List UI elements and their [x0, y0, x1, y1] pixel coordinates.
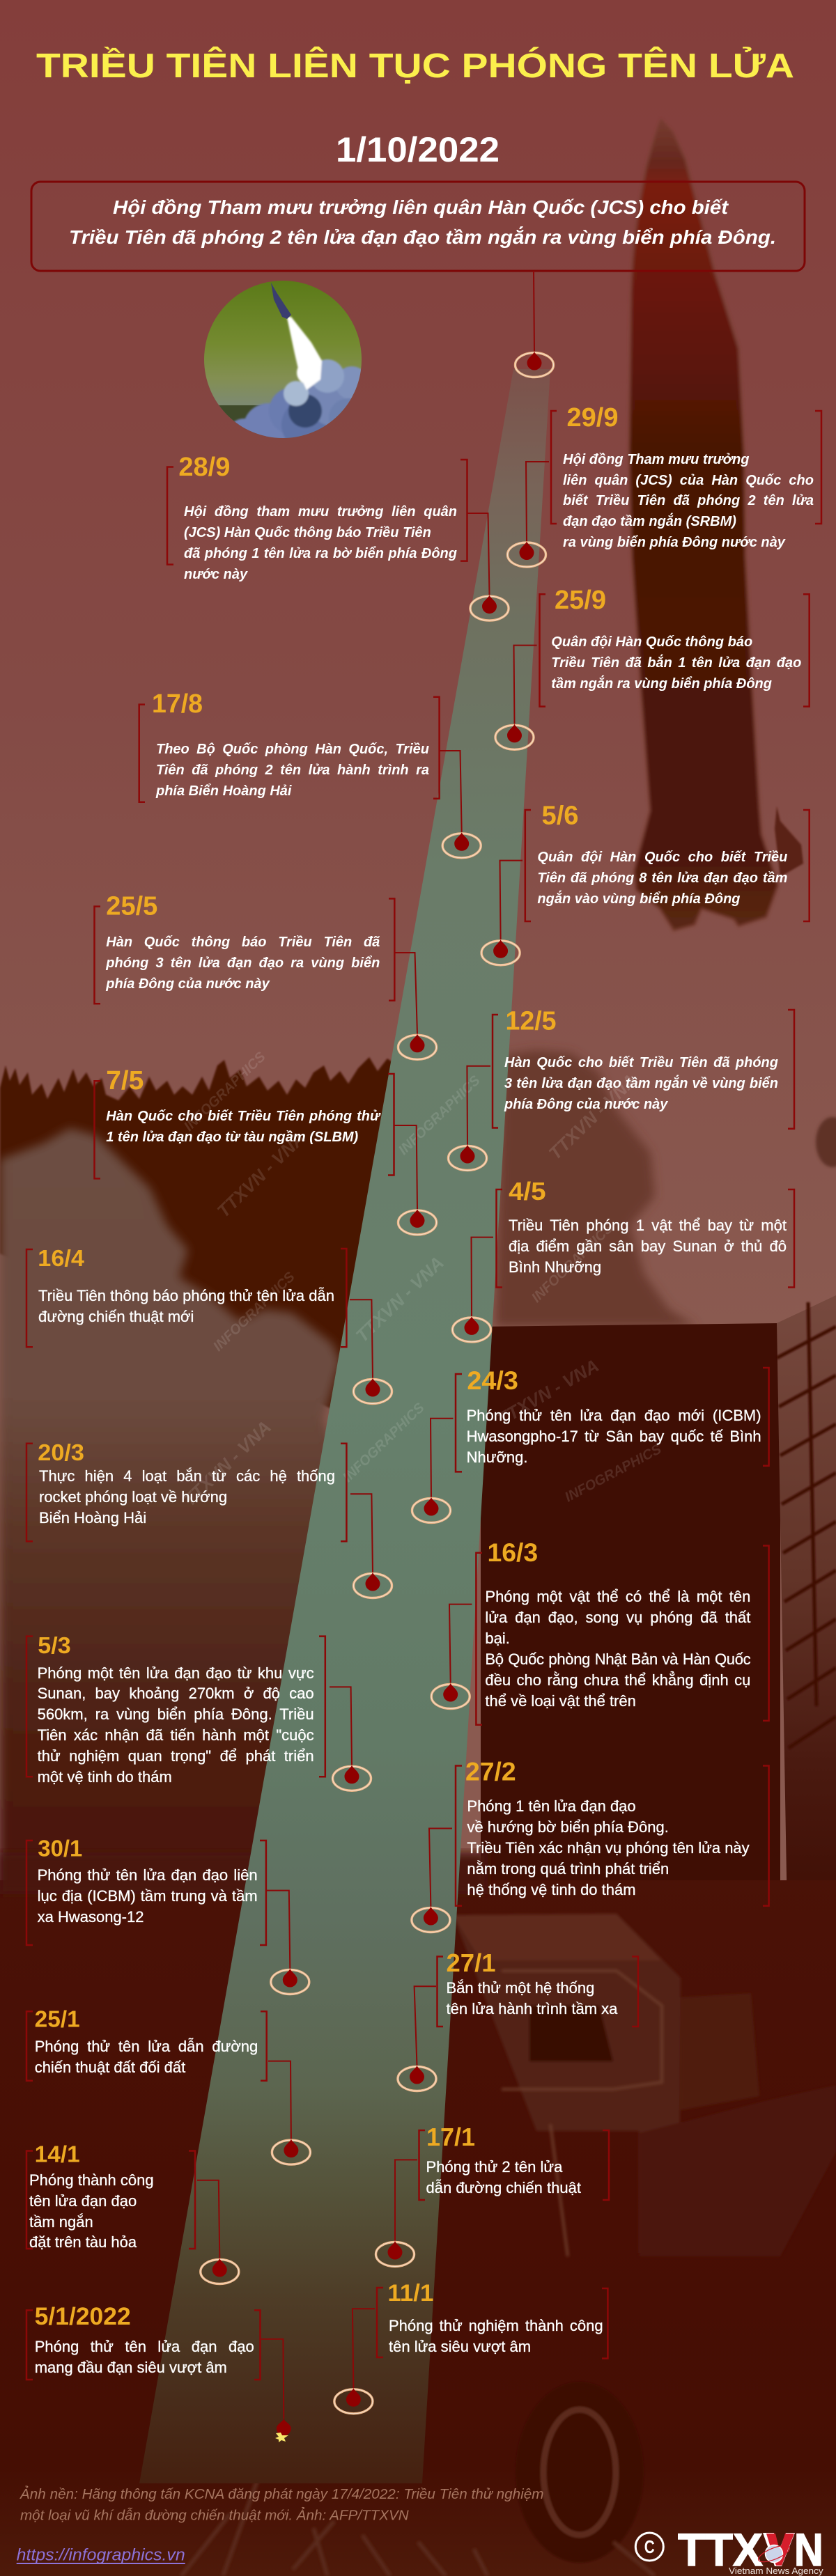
bracket: [493, 1010, 794, 1129]
connector: [395, 2160, 417, 2241]
callout box: [31, 182, 805, 271]
bracket: [496, 1189, 794, 1287]
launcher lattice: [777, 1295, 836, 1915]
text block: Thực hiện 4 loạt bắn từ các hệ thống: [39, 1467, 335, 1485]
watermarks: TTXVN - VNA: [493, 1355, 603, 1430]
text block: [38, 1865, 258, 1928]
copyright symbol: C: [644, 2536, 655, 2557]
marker: [453, 1316, 490, 1342]
text block: đặt trên tàu hỏa: [29, 2233, 137, 2251]
photo credit note: Ảnh nền: Hãng thông tấn KCNA đăng phát ngày 17/4/2022: Triều Tiên thử nghiệm: [19, 2485, 544, 2502]
marker: [507, 542, 546, 567]
grass: [181, 2479, 655, 2576]
text block: [156, 740, 429, 802]
panel: 11/1: [334, 2280, 607, 2414]
connector: [467, 513, 489, 595]
text block: biết Triều Tiên đã phóng 2 tên lửa: [563, 493, 814, 508]
text block: [106, 932, 380, 995]
watermarks: TTXVN - VNA: [545, 1070, 641, 1164]
text block: [426, 2157, 594, 2199]
text block: tầm ngắn ra vùng biển phía Đông: [551, 676, 772, 692]
text block: Phóng thử nghiệm thành công: [389, 2317, 603, 2334]
text block: về hướng bờ biển phía Đông.: [467, 1818, 669, 1836]
final drop: [277, 2419, 291, 2436]
bracket: [26, 1444, 346, 1541]
marker: [412, 1907, 450, 1932]
text block: [504, 1053, 778, 1116]
marker: [449, 1145, 486, 1170]
text block: đã phóng 1 tên lửa ra bờ biển phía Đông: [184, 546, 457, 561]
smoke cloud: [0, 1128, 418, 1894]
bracket: [539, 594, 810, 706]
text block: Quân đội Hàn Quốc cho biết Triều: [537, 850, 787, 865]
text block: Nhưỡng.: [467, 1449, 527, 1466]
text block: tên lửa đạn đạo: [29, 2192, 137, 2210]
watermarks: INFOGRAPHICS: [529, 1220, 617, 1306]
wordmark: N: [794, 2524, 823, 2575]
connector: [415, 1986, 436, 2066]
left tree canopy: [0, 1057, 446, 1462]
panel: 25/9: [495, 586, 810, 749]
text block: [467, 1796, 755, 1900]
marker: [442, 832, 481, 858]
text block: [39, 1466, 335, 1529]
date: 17/8: [152, 689, 203, 719]
text block: 1 tên lửa đạn đạo từ tàu ngầm (SLBM): [106, 1130, 358, 1145]
text block: Hàn Quốc cho biết Triều Tiên đã phóng: [504, 1055, 778, 1070]
date: 5/1/2022: [35, 2303, 131, 2330]
text block: [563, 450, 814, 554]
watermarks: TTXVN - VNA: [213, 1127, 309, 1221]
text block: [38, 1286, 334, 1327]
marker: 1/10: [516, 352, 553, 377]
light beam: [139, 369, 550, 2483]
text block: dẫn đường chiến thuật: [426, 2179, 581, 2196]
marker: [398, 2066, 436, 2091]
text block: liên quân (JCS) của Hàn Quốc cho: [563, 472, 814, 487]
text block: [29, 2170, 169, 2254]
panel: 7/5: [95, 1066, 436, 1235]
marker: [431, 1683, 470, 1709]
text block: Hội đồng Tham mưu trưởng: [563, 452, 750, 467]
date: 16/3: [488, 1538, 538, 1567]
date: 30/1: [38, 1835, 82, 1861]
photo credit note: [19, 2485, 544, 2524]
marker: [495, 724, 534, 749]
logo: TTXVN: [635, 2524, 823, 2576]
panel: 5/6: [481, 802, 810, 965]
watermarks: INFOGRAPHICS: [562, 1442, 665, 1505]
date: 11/1: [387, 2280, 433, 2306]
text block: đều cho rằng chưa thể khẳng định cụ: [485, 1671, 750, 1689]
marker: [481, 939, 520, 965]
text block: Phóng thử 2 tên lửa: [426, 2158, 562, 2176]
text block: Hàn Quốc thông báo Triều Tiên đã: [106, 935, 380, 950]
date: 16/4: [38, 1245, 85, 1271]
text block: Phóng thành công: [29, 2171, 154, 2189]
connector: [514, 646, 537, 724]
text block: ra vùng biển phía Đông nước này: [563, 535, 785, 550]
text block: phía Đông của nước này: [504, 1097, 667, 1112]
text block: [35, 2336, 254, 2378]
date: 20/3: [38, 1439, 84, 1465]
text block: Bình Nhưỡng: [509, 1258, 601, 1276]
text block: [551, 632, 801, 695]
missile truck: [453, 1914, 836, 2256]
watermarks: INFOGRAPHICS: [396, 1072, 483, 1158]
bracket: [476, 1546, 769, 1725]
text block: hệ thống vệ tinh do thám: [467, 1881, 636, 1898]
panel: 27/1: [398, 1949, 638, 2091]
text block: tên lửa siêu vượt âm: [389, 2338, 531, 2355]
panel: 20/3: [26, 1439, 392, 1598]
text block: Triều Tiên phóng 1 vật thể bay từ một: [509, 1217, 787, 1234]
text block: ngắn vào vùng biển phía Đông: [537, 891, 741, 907]
marker: [333, 1765, 371, 1790]
connector: [350, 1494, 373, 1572]
connector: [330, 1687, 352, 1765]
text block: Hội đồng tham mưu trưởng liên quân: [184, 504, 457, 520]
bracket: [95, 1074, 394, 1178]
date: 7/5: [106, 1066, 144, 1095]
title: TRIỀU TIÊN LIÊN TỤC PHÓNG TÊN LỬA: [36, 47, 794, 85]
text block: thể về loại vật thể trên: [485, 1692, 636, 1710]
panel: 28/9: [167, 453, 509, 620]
right dark building: [481, 1323, 836, 2089]
panel: 29/9: [507, 403, 821, 567]
panel: 17/8: [139, 689, 481, 858]
text block: Triều Tiên xác nhận vụ phóng tên lửa này: [467, 1839, 750, 1857]
text block: [35, 2036, 258, 2078]
marker: [470, 595, 509, 620]
connector: [440, 751, 462, 832]
panel: 5/3: [26, 1632, 371, 1790]
lower dark ground: [0, 1880, 836, 2576]
watermarks: INFOGRAPHICS: [210, 1269, 298, 1355]
text block: xa Hwasong-12: [38, 1908, 144, 1926]
text block: tầm ngắn: [29, 2213, 93, 2230]
text block: thử nghiệm quan trọng" để phát triển: [38, 1747, 314, 1765]
connector: [394, 953, 417, 1034]
text block: 560km, ra vùng biển phía Đông. Triều: [38, 1705, 314, 1723]
bracket: [26, 2011, 267, 2081]
text block: Hwasongpho-17 từ Sân bay quốc tế Bình: [467, 1428, 761, 1445]
date: 4/5: [509, 1177, 546, 1205]
text block: [389, 2316, 603, 2357]
bracket: [26, 1841, 266, 1945]
marker: [398, 1034, 436, 1059]
marker: [354, 1572, 392, 1598]
bracket: [26, 2310, 261, 2380]
panel: 16/3: [431, 1538, 769, 1725]
text block: [537, 848, 787, 910]
text block: Bộ Quốc phòng Nhật Bản và Hàn Quốc: [485, 1650, 750, 1668]
connector: [353, 2309, 375, 2388]
text block: Phóng thử tên lửa đạn đạo liên: [38, 1866, 258, 1884]
bracket: [438, 1957, 638, 2027]
date: 5/6: [542, 802, 578, 831]
website link: https://infographics.vn: [17, 2546, 185, 2565]
bracket: [551, 411, 821, 524]
text block: Phóng thử tên lửa dẫn đường: [35, 2038, 258, 2055]
text block: Biển Hoàng Hải: [39, 1509, 146, 1527]
connector: [500, 861, 522, 939]
text block: chiến thuật đất đối đất: [35, 2059, 185, 2076]
text block: Tiên đã phóng 2 tên lửa hành trình ra: [156, 763, 429, 778]
marker: [272, 2139, 310, 2164]
text block: nằm trong quá trình phát triển: [467, 1860, 669, 1878]
text block: [467, 1405, 761, 1468]
date: 17/1: [426, 2123, 475, 2151]
marker: [271, 1969, 309, 1995]
callout text: Hội đồng Tham mưu trưởng liên quân Hàn Quốc (JCS) cho biết: [113, 196, 729, 218]
marker: [376, 2241, 414, 2266]
wordmark: [678, 2524, 823, 2575]
bracket: [95, 898, 394, 1004]
bracket: [419, 2130, 609, 2200]
date: 27/1: [446, 1949, 496, 1977]
marker: [201, 2258, 239, 2284]
connector: [449, 1605, 472, 1683]
text block: Phóng 1 tên lửa đạn đạo: [467, 1797, 636, 1815]
text block: một vệ tinh do thám: [38, 1768, 172, 1786]
bracket: [26, 2150, 195, 2249]
date: 29/9: [567, 403, 619, 432]
callout text: Triều Tiên đã phóng 2 tên lửa đạn đạo tầm ngắn ra vùng biển phía Đông.: [69, 226, 776, 248]
connector: [267, 1891, 290, 1969]
text block: phóng 3 tên lửa đạn đạo ra vùng biển: [106, 955, 380, 971]
text block: rocket phóng loạt về hướng: [39, 1488, 227, 1506]
bracket: [26, 1637, 325, 1777]
red V: [763, 2533, 795, 2566]
text block: [485, 1586, 750, 1712]
panel: 4/5: [453, 1177, 794, 1342]
connector: [526, 462, 549, 542]
wordmark: TTX: [678, 2524, 763, 2575]
date heading: 1/10/2022: [336, 130, 500, 169]
text block: [184, 502, 457, 586]
connector: [261, 2339, 284, 2419]
text block: 3 tên lửa đạn đạo tầm ngắn về vùng biển: [504, 1076, 778, 1091]
truck wheel: [516, 2382, 644, 2563]
bracket: [456, 1368, 769, 1472]
date: 25/9: [555, 586, 606, 615]
text block: bại.: [485, 1630, 510, 1647]
text block: Quân đội Hàn Quốc thông báo: [551, 634, 752, 650]
bracket: [26, 1249, 346, 1347]
text block: phía Biển Hoàng Hải: [156, 783, 291, 799]
text block: (JCS) Hàn Quốc thông báo Triều Tiên: [184, 525, 431, 540]
date: 12/5: [506, 1007, 556, 1036]
text block: [446, 1978, 627, 2020]
text block: đường chiến thuật mới: [38, 1308, 194, 1325]
text block: đạn đạo tầm ngắn (SRBM): [563, 514, 736, 529]
panel: 16/4: [26, 1245, 392, 1404]
text block: Hàn Quốc cho biết Triều Tiên phóng thử: [106, 1109, 380, 1124]
connector: [467, 1066, 490, 1145]
text block: tên lửa hành trình tầm xa: [446, 2000, 617, 2017]
photo: missile launch: [204, 281, 362, 438]
marker: [398, 1209, 436, 1235]
text block: địa điểm gần sân bay Sunan ở thủ đô: [509, 1238, 787, 1255]
text block: mang đầu đạn siêu vượt âm: [35, 2359, 227, 2376]
connector: [268, 2061, 291, 2139]
text block: Phóng thử tên lửa đạn đạo mới (ICBM): [467, 1407, 761, 1424]
watermarks: [179, 1049, 665, 1511]
text block: Triều Tiên đã bắn 1 tên lửa đạn đạo: [551, 655, 801, 671]
watermarks: TTXVN - VNA: [352, 1252, 448, 1346]
bracket: [456, 1766, 769, 1906]
watermarks: INFOGRAPHICS: [181, 1049, 269, 1134]
globe: [757, 2543, 791, 2565]
bracket: [525, 810, 810, 921]
impact star: [275, 2433, 288, 2442]
copyright symbol: [635, 2533, 663, 2561]
date: 25/1: [35, 2006, 80, 2032]
date: 27/2: [465, 1758, 516, 1786]
connector: [394, 1125, 417, 1209]
callout text: [69, 196, 776, 248]
bracket: [377, 2288, 607, 2359]
date: 28/9: [178, 453, 230, 482]
marker: [334, 2388, 373, 2414]
rocket silhouette: [629, 120, 778, 930]
panel: 5/1/2022: [26, 2303, 291, 2442]
connector: [471, 1238, 493, 1316]
bracket: [139, 697, 440, 802]
watermarks: INFOGRAPHICS: [340, 1400, 428, 1485]
panel: 14/1: [26, 2141, 239, 2284]
text block: Bắn thử một hệ thống: [446, 1979, 594, 1997]
text block: Sunan, bay khoảng 270km ở độ cao: [38, 1685, 314, 1702]
panel: 25/5: [95, 892, 436, 1059]
text block: phía Đông của nước này: [106, 976, 270, 992]
text block: [106, 1107, 380, 1148]
marker: [412, 1497, 450, 1522]
panel: 25/1: [26, 2006, 310, 2164]
text block: Triều Tiên thông báo phóng thử tên lửa dẫn: [38, 1287, 334, 1304]
connector: [350, 1299, 373, 1378]
panel: 27/2: [412, 1758, 769, 1932]
panel: 30/1: [26, 1835, 309, 1995]
text block: Theo Bộ Quốc phòng Hàn Quốc, Triều: [156, 742, 429, 757]
connector: [429, 1829, 452, 1907]
text block: Tiên xác nhận đã tiến hành một "cuộc: [38, 1726, 314, 1744]
right tree mass: [495, 1050, 697, 1327]
date: 24/3: [467, 1366, 518, 1395]
connector: [431, 1419, 453, 1497]
date: 14/1: [35, 2141, 80, 2167]
text block: Phóng thử tên lửa đạn đạo: [35, 2338, 254, 2355]
text block: [509, 1215, 787, 1278]
panel: 24/3: [412, 1366, 769, 1522]
date: 5/3: [38, 1632, 71, 1658]
panel: 12/5: [449, 1007, 794, 1170]
watermarks: TTXVN - VNA: [179, 1416, 275, 1511]
bracket: [167, 460, 467, 565]
agency name: Vietnam News Agency: [729, 2566, 823, 2576]
text block: lục địa (ICBM) tầm trung và tầm: [38, 1887, 258, 1905]
date: 25/5: [106, 892, 157, 921]
panel: 17/1: [376, 2123, 609, 2266]
marker: [354, 1378, 392, 1404]
photo credit note: một loại vũ khí dẫn đường chiến thuật mới. Ảnh: AFP/TTXVN: [20, 2507, 409, 2524]
text block: [38, 1663, 314, 1788]
text block: Phóng một tên lửa đạn đạo từ khu vực: [38, 1664, 314, 1681]
text block: Tiên đã phóng 8 tên lửa đạn đạo tầm: [537, 871, 787, 886]
text block: nước này: [184, 567, 247, 582]
text block: Phóng một vật thể có thể là một tên: [485, 1588, 750, 1605]
text block: lửa đạn đạo, song vụ phóng đã thất: [485, 1609, 750, 1626]
connector: [197, 2180, 219, 2258]
